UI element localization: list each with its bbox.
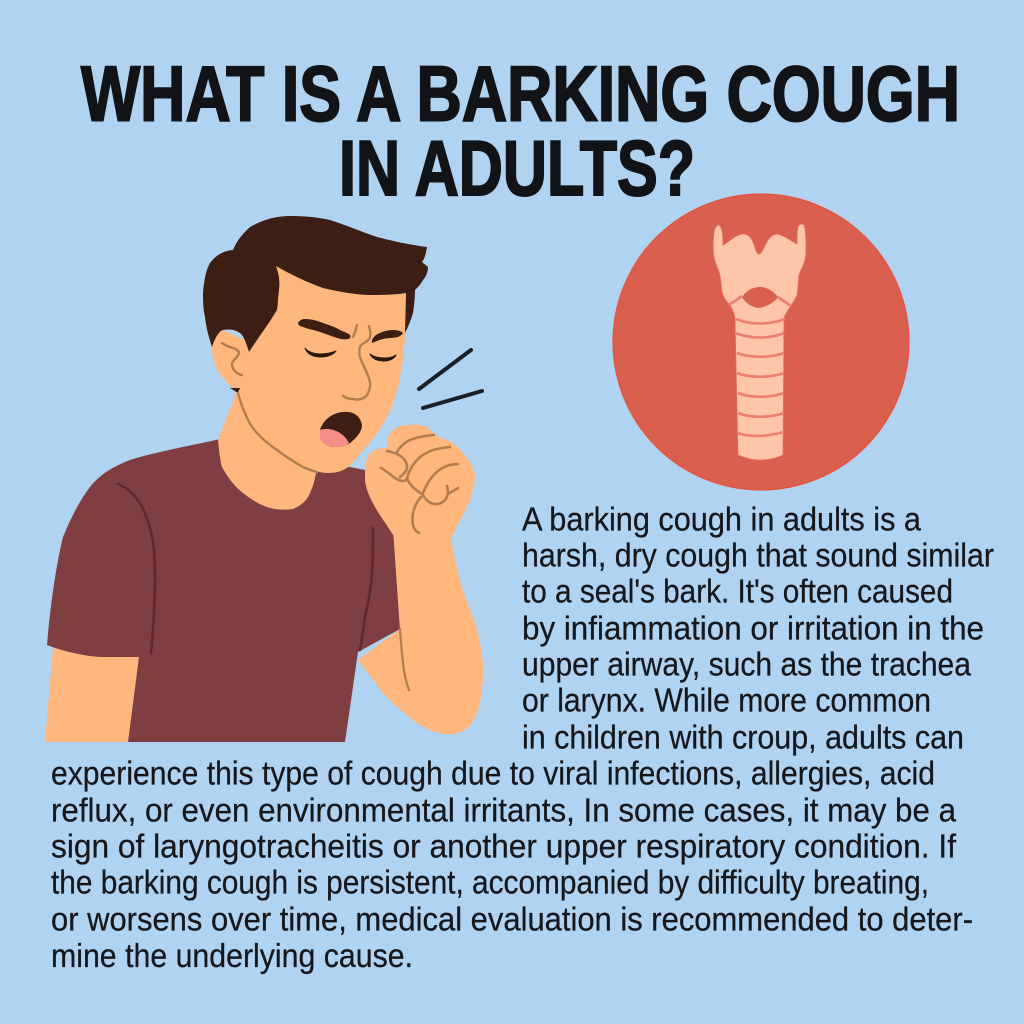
body text: mine the underlying cause. <box>51 937 413 974</box>
body text: reflux, or even environmental irritants, In some cases, it may be a <box>51 792 957 828</box>
fist <box>365 425 475 540</box>
tongue <box>320 429 349 447</box>
icon: throat circle <box>613 194 909 490</box>
mouth <box>320 412 362 447</box>
body text: by infiammation or irritation in the <box>522 610 984 646</box>
circle background <box>613 194 909 490</box>
ear and jaw lines <box>222 325 370 472</box>
ear <box>212 330 255 388</box>
larynx and trachea <box>713 224 806 460</box>
icon: man coughing <box>45 216 483 742</box>
shirt folds <box>118 484 373 653</box>
body text: or worsens over time, medical evaluation is recommended to deter- <box>51 900 973 938</box>
body text: harsh, dry cough that sound similar <box>522 536 994 574</box>
body text: upper airway, such as the trachea <box>522 646 972 682</box>
hair below ear <box>230 388 240 393</box>
body text: to a seal's bark. It's often caused <box>522 572 953 610</box>
body text: sign of laryngotracheitis or another upper respiratory condition. If <box>51 828 957 864</box>
title: IN ADULTS? <box>339 124 695 212</box>
body text: experience this type of cough due to viral infections, allergies, acid <box>51 754 935 792</box>
raised arm <box>358 528 483 734</box>
body text <box>51 500 994 974</box>
hair <box>203 216 428 352</box>
body text: A barking cough in adults is a <box>522 500 922 538</box>
tracheal rings <box>729 296 791 436</box>
shirt <box>47 439 400 742</box>
fist lines <box>381 435 458 533</box>
arm crease <box>400 629 409 690</box>
icon: cough motion lines <box>419 350 482 408</box>
title <box>81 50 960 212</box>
body text: or larynx. While more common <box>522 682 931 718</box>
eyes <box>305 348 396 361</box>
neck <box>218 388 340 510</box>
face <box>232 266 406 473</box>
left forearm <box>45 648 139 742</box>
body text: the barking cough is persistent, accompanied by difficulty breating, <box>51 864 929 900</box>
eyebrows <box>298 319 403 343</box>
body text: in children with croup, adults can <box>522 718 964 756</box>
glottis opening <box>742 287 778 308</box>
